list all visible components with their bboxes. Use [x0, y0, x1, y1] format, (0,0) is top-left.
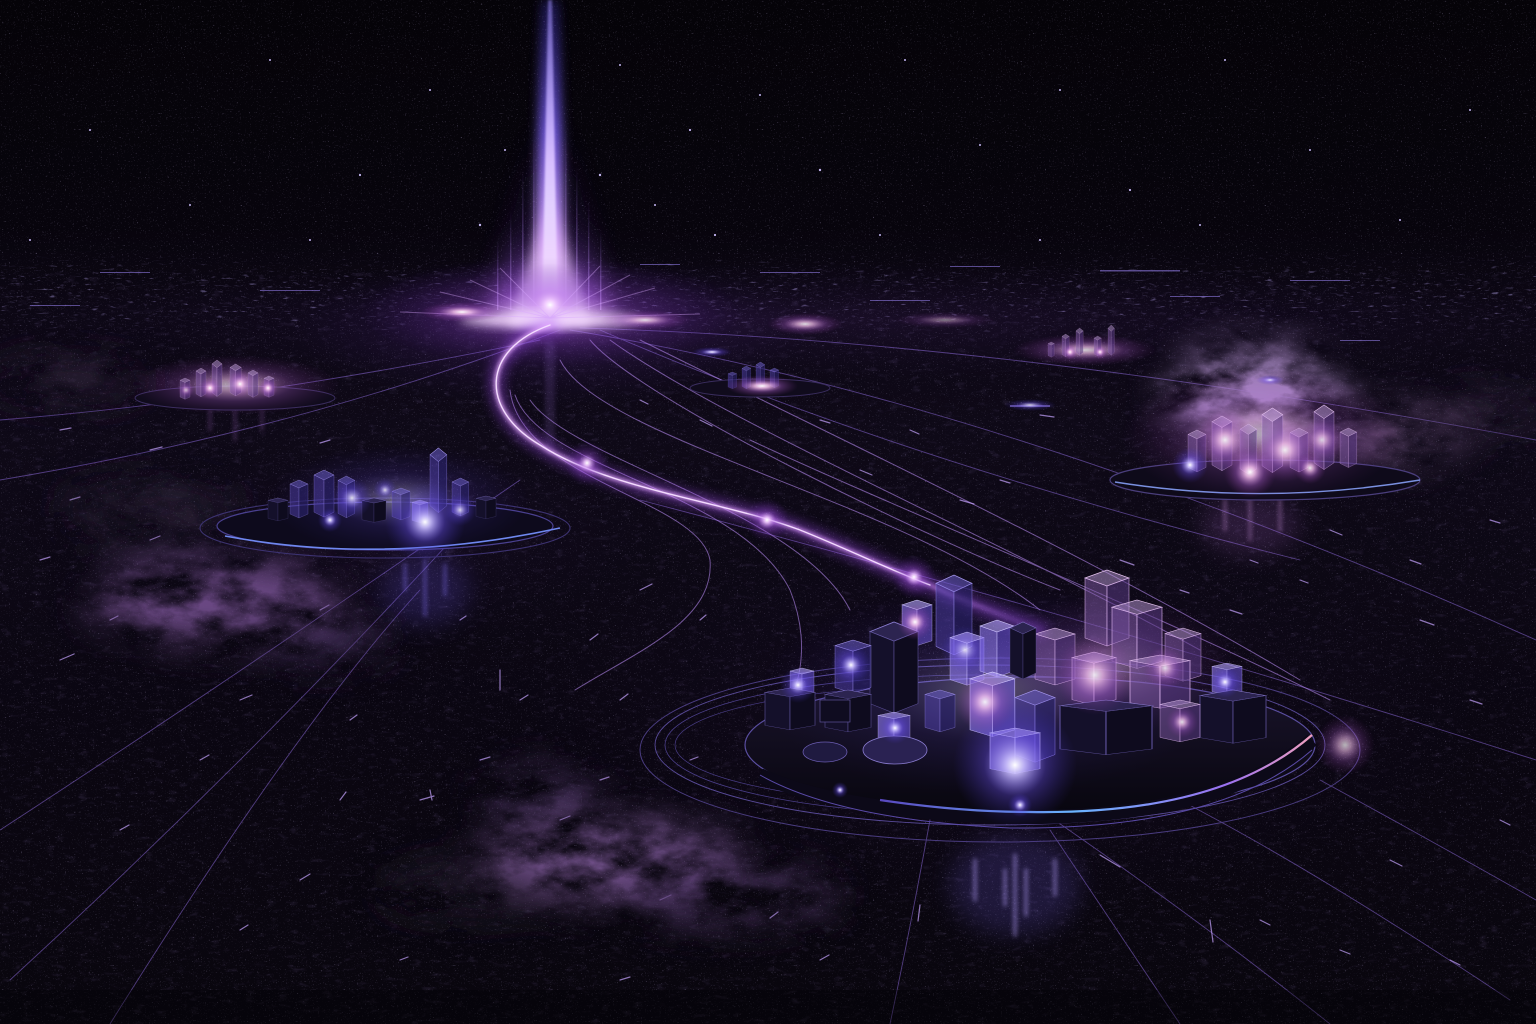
far city: centre [690, 362, 830, 397]
mid city: left blue platform [200, 445, 570, 562]
bottom vignette [0, 990, 1536, 1024]
small horizon light clusters [420, 302, 1284, 411]
distant horizon lights [30, 264, 1380, 407]
radiating light traces across the ground [0, 328, 1536, 1024]
sparkle dashes [40, 400, 1510, 980]
clouds: drifting purple smoke [0, 347, 1536, 925]
pods [803, 700, 927, 764]
path node lights [565, 441, 936, 599]
buildings [765, 570, 1266, 762]
glowing main path [496, 325, 1040, 630]
energy beam rising from the core [360, 0, 740, 367]
mid city: right pink platform [1110, 367, 1420, 503]
vertical light rays [497, 120, 601, 310]
main city: foreground platform [640, 570, 1375, 842]
far city: right [1013, 325, 1157, 366]
platform rings [640, 658, 1360, 842]
building lights [780, 604, 1241, 827]
scattered stars [29, 59, 1471, 241]
horizon haze band [0, 255, 1536, 910]
city glow [760, 585, 1240, 795]
far city: left [130, 355, 340, 415]
reflection streaks on floor [210, 345, 1300, 935]
